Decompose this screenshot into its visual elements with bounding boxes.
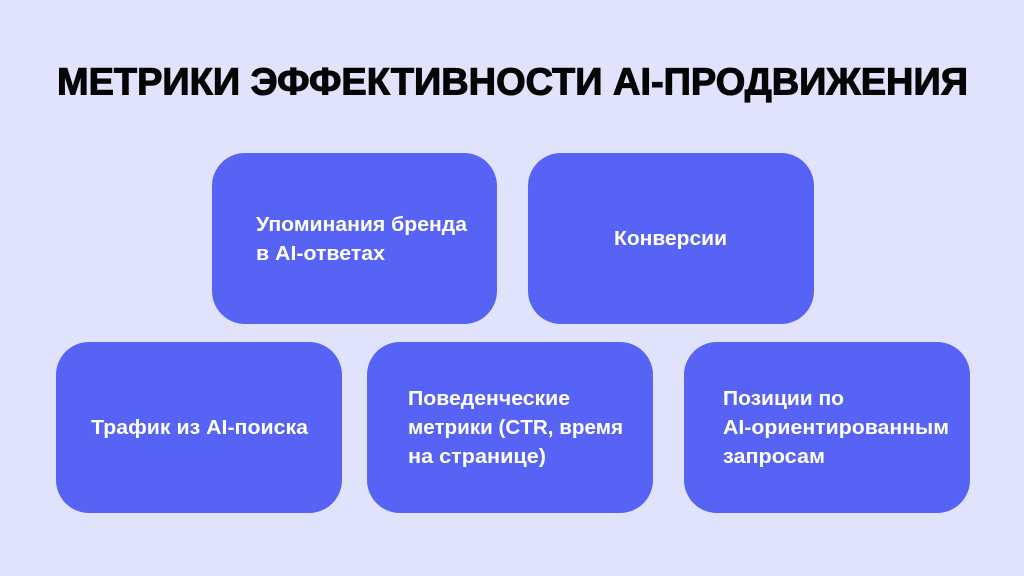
panel: brand mentions — [212, 153, 497, 324]
panel: AI-oriented query positions: AI-ориентированным — [723, 417, 949, 439]
panel: AI search traffic: Трафик из AI-поиска — [91, 417, 309, 439]
panel: conversions: Конверсии — [614, 228, 727, 250]
panel: behavioral metrics: на странице) — [408, 446, 546, 468]
panel: conversions — [528, 153, 814, 324]
panel: behavioral metrics — [367, 342, 653, 513]
panel: brand mentions: Упоминания бренда — [256, 214, 468, 236]
panel: AI-oriented query positions: Позиции по — [723, 388, 844, 410]
panel: AI search traffic — [56, 342, 342, 513]
panel: AI-oriented query positions: запросам — [723, 446, 825, 468]
panel: AI-oriented query positions — [684, 342, 970, 513]
panel: behavioral metrics: Поведенческие — [408, 388, 570, 410]
title: МЕТРИКИ ЭФФЕКТИВНОСТИ AI-ПРОДВИЖЕНИЯ — [57, 62, 968, 104]
panel: behavioral metrics: метрики (CTR, время — [408, 417, 623, 439]
panel: brand mentions: в AI-ответах — [256, 243, 385, 265]
